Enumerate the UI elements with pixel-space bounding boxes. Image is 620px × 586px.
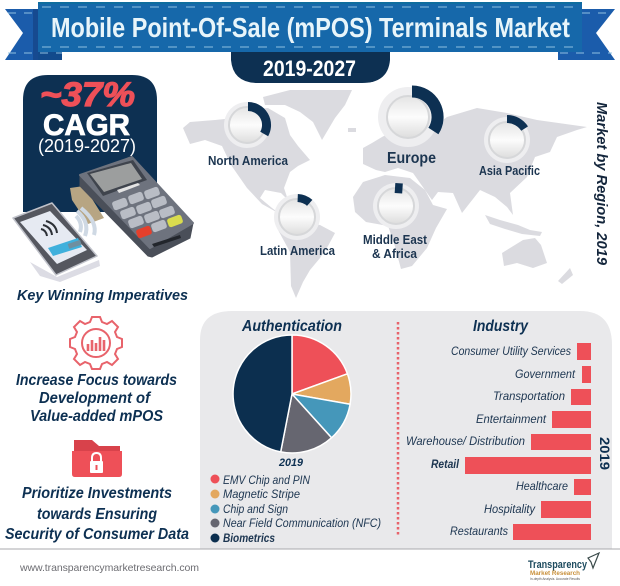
side heading: market by region: Market by Region, 2019: [593, 102, 610, 266]
heading: authentication: Authentication: [241, 318, 342, 335]
right ribbon tail: [558, 9, 615, 60]
CAGR panel: [23, 75, 157, 212]
left ribbon tail: [5, 9, 40, 60]
donut: Middle East and Africa: [373, 183, 419, 229]
label: Latin America: Latin America: [260, 244, 336, 258]
legend: [210, 473, 381, 545]
logo: Transparency Market Research: Transparency: [528, 559, 588, 571]
imperative 2 text: towards Ensuring: [37, 506, 157, 523]
heading: industry: Industry: [473, 318, 529, 335]
icon: smartphone: [13, 203, 100, 282]
year pill: [231, 52, 390, 83]
bar chart: industry: Healthcare: [516, 479, 568, 493]
imperative 2 text: [5, 485, 189, 543]
CAGR value: ~37%: [40, 76, 135, 114]
imperative 1 text: [16, 372, 177, 425]
legend: Chip and Sign: [223, 502, 288, 516]
logo: Transparency Market Research: [528, 553, 599, 581]
bar chart: industry: Hospitality: [484, 502, 536, 516]
legend: Magnetic Stripe: [223, 487, 300, 501]
bar chart year: 2019: [597, 437, 613, 470]
legend: Biometrics: [223, 531, 275, 545]
heading: key winning imperatives: Key Winning Imperatives: [17, 287, 188, 304]
CAGR label: CAGR: [43, 109, 130, 142]
label: Europe: Europe: [387, 150, 436, 167]
bar chart: industry: Transportation: [493, 389, 565, 403]
year pill: 2019-2027: [263, 56, 356, 81]
icon: locked folder: [72, 440, 122, 477]
pie chart: [233, 335, 351, 453]
footer url: www.transparencymarketresearch.com: [19, 562, 199, 574]
pie year: 2019: [278, 457, 304, 469]
icon: NFC waves: [76, 208, 95, 236]
bar chart: industry: Government: [515, 367, 576, 381]
title banner: [5, 2, 615, 60]
imperative 1 text: Increase Focus towards: [16, 372, 177, 389]
bar chart: industry: Warehouse/ Distribution: [406, 434, 525, 448]
donut: North America: [224, 102, 270, 148]
imperative 1 text: Value-added mPOS: [30, 408, 163, 425]
banner body: [38, 2, 582, 52]
label: Middle East and Africa: & Africa: [372, 247, 418, 261]
imperative 2 text: Prioritize Investments: [22, 485, 172, 502]
CAGR period: (2019-2027): [38, 136, 136, 156]
bar chart: industry: Entertainment: [476, 412, 547, 426]
legend: Near Field Communication (NFC): [223, 516, 381, 530]
label: North America: North America: [208, 153, 289, 168]
logo: Transparency Market Research: In-depth Analysis. Accurate Results: [530, 577, 580, 581]
world map: [183, 90, 587, 298]
imperative 1 text: Development of: [39, 390, 152, 407]
label: Asia Pacific: Asia Pacific: [479, 164, 540, 178]
bar chart: industry: Restaurants: [450, 524, 508, 538]
imperative 2 text: Security of Consumer Data: [5, 526, 189, 543]
donut: Asia Pacific: [484, 117, 530, 163]
label: Middle East and Africa: [363, 233, 428, 261]
bar chart: industry: [406, 343, 591, 540]
logo: Transparency Market Research: Market Research: [530, 570, 580, 577]
icon: payment terminal: [70, 157, 193, 257]
donut: Latin America: [274, 194, 320, 240]
bar chart: industry: Retail: [431, 457, 460, 471]
legend: EMV Chip and PIN: [223, 473, 310, 487]
donut: Europe: [378, 87, 438, 147]
icon: gear with chart: [70, 317, 122, 369]
label: Middle East and Africa: Middle East: [363, 233, 428, 247]
panel: authentication and industry: [200, 311, 613, 549]
bar chart: industry: Consumer Utility Services: [451, 344, 571, 358]
